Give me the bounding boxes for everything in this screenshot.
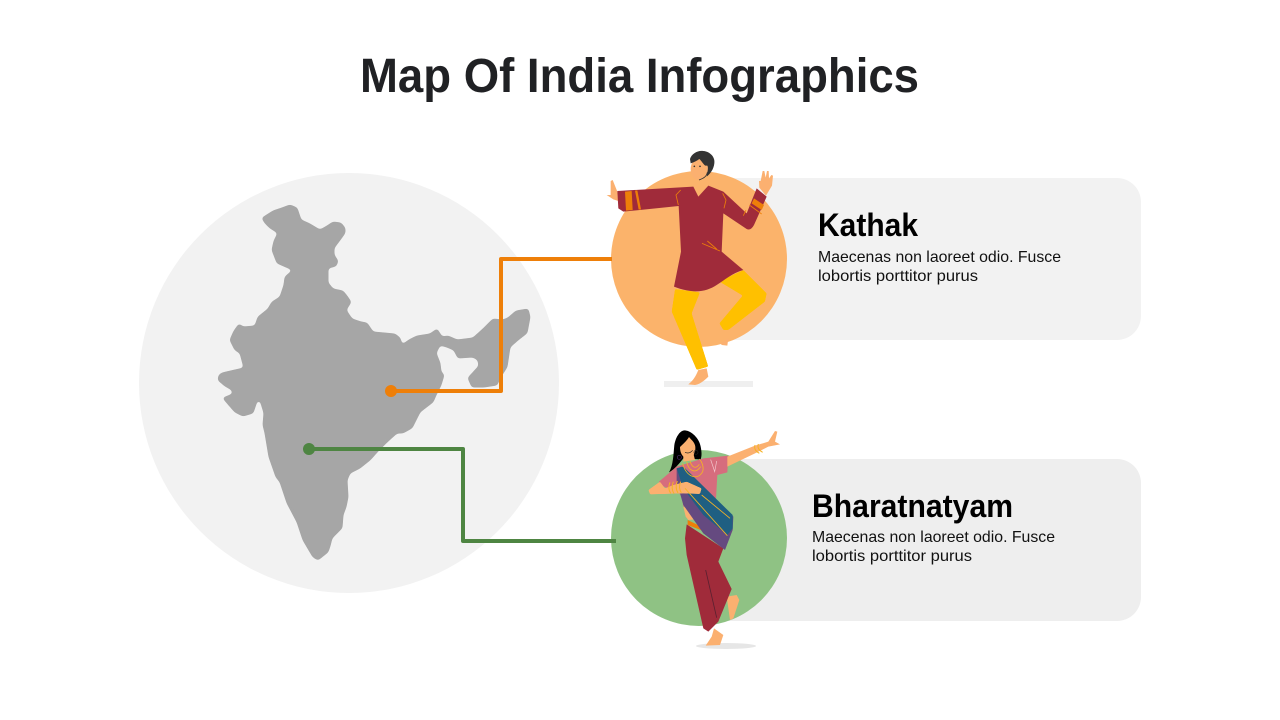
panel: map backdrop circle [139, 173, 559, 593]
text block: Kathak description [818, 249, 1061, 285]
text block: Bharatnatyam description: Maecenas non laoreet odio. Fusce [812, 529, 1055, 546]
heading: Bharatnatyam: Bharatnatyam [812, 488, 1013, 524]
illustration: Kathak dancer [607, 151, 773, 387]
title: Map Of India Infographics [360, 50, 919, 103]
connector: green line to Bharatnatyam [303, 443, 616, 541]
text block: Kathak description: Maecenas non laoreet odio. Fusce [818, 249, 1061, 266]
marker: orange dot [385, 385, 397, 397]
text block: Bharatnatyam description [812, 529, 1055, 565]
connector: orange line to Kathak [385, 259, 612, 397]
illustration: Bharatnatyam dancer [648, 430, 780, 649]
circle: Kathak badge [611, 171, 787, 347]
panel: Bharatnatyam card [699, 459, 1141, 621]
text block: Bharatnatyam description: lobortis porttitor purus [812, 548, 972, 565]
marker: green dot [303, 443, 315, 455]
text block: Kathak description: lobortis porttitor purus [818, 268, 978, 285]
map of India [218, 205, 530, 560]
panel: Kathak card [699, 178, 1141, 340]
heading: Kathak: Kathak [818, 207, 918, 243]
circle: Bharatnatyam badge [611, 450, 787, 626]
